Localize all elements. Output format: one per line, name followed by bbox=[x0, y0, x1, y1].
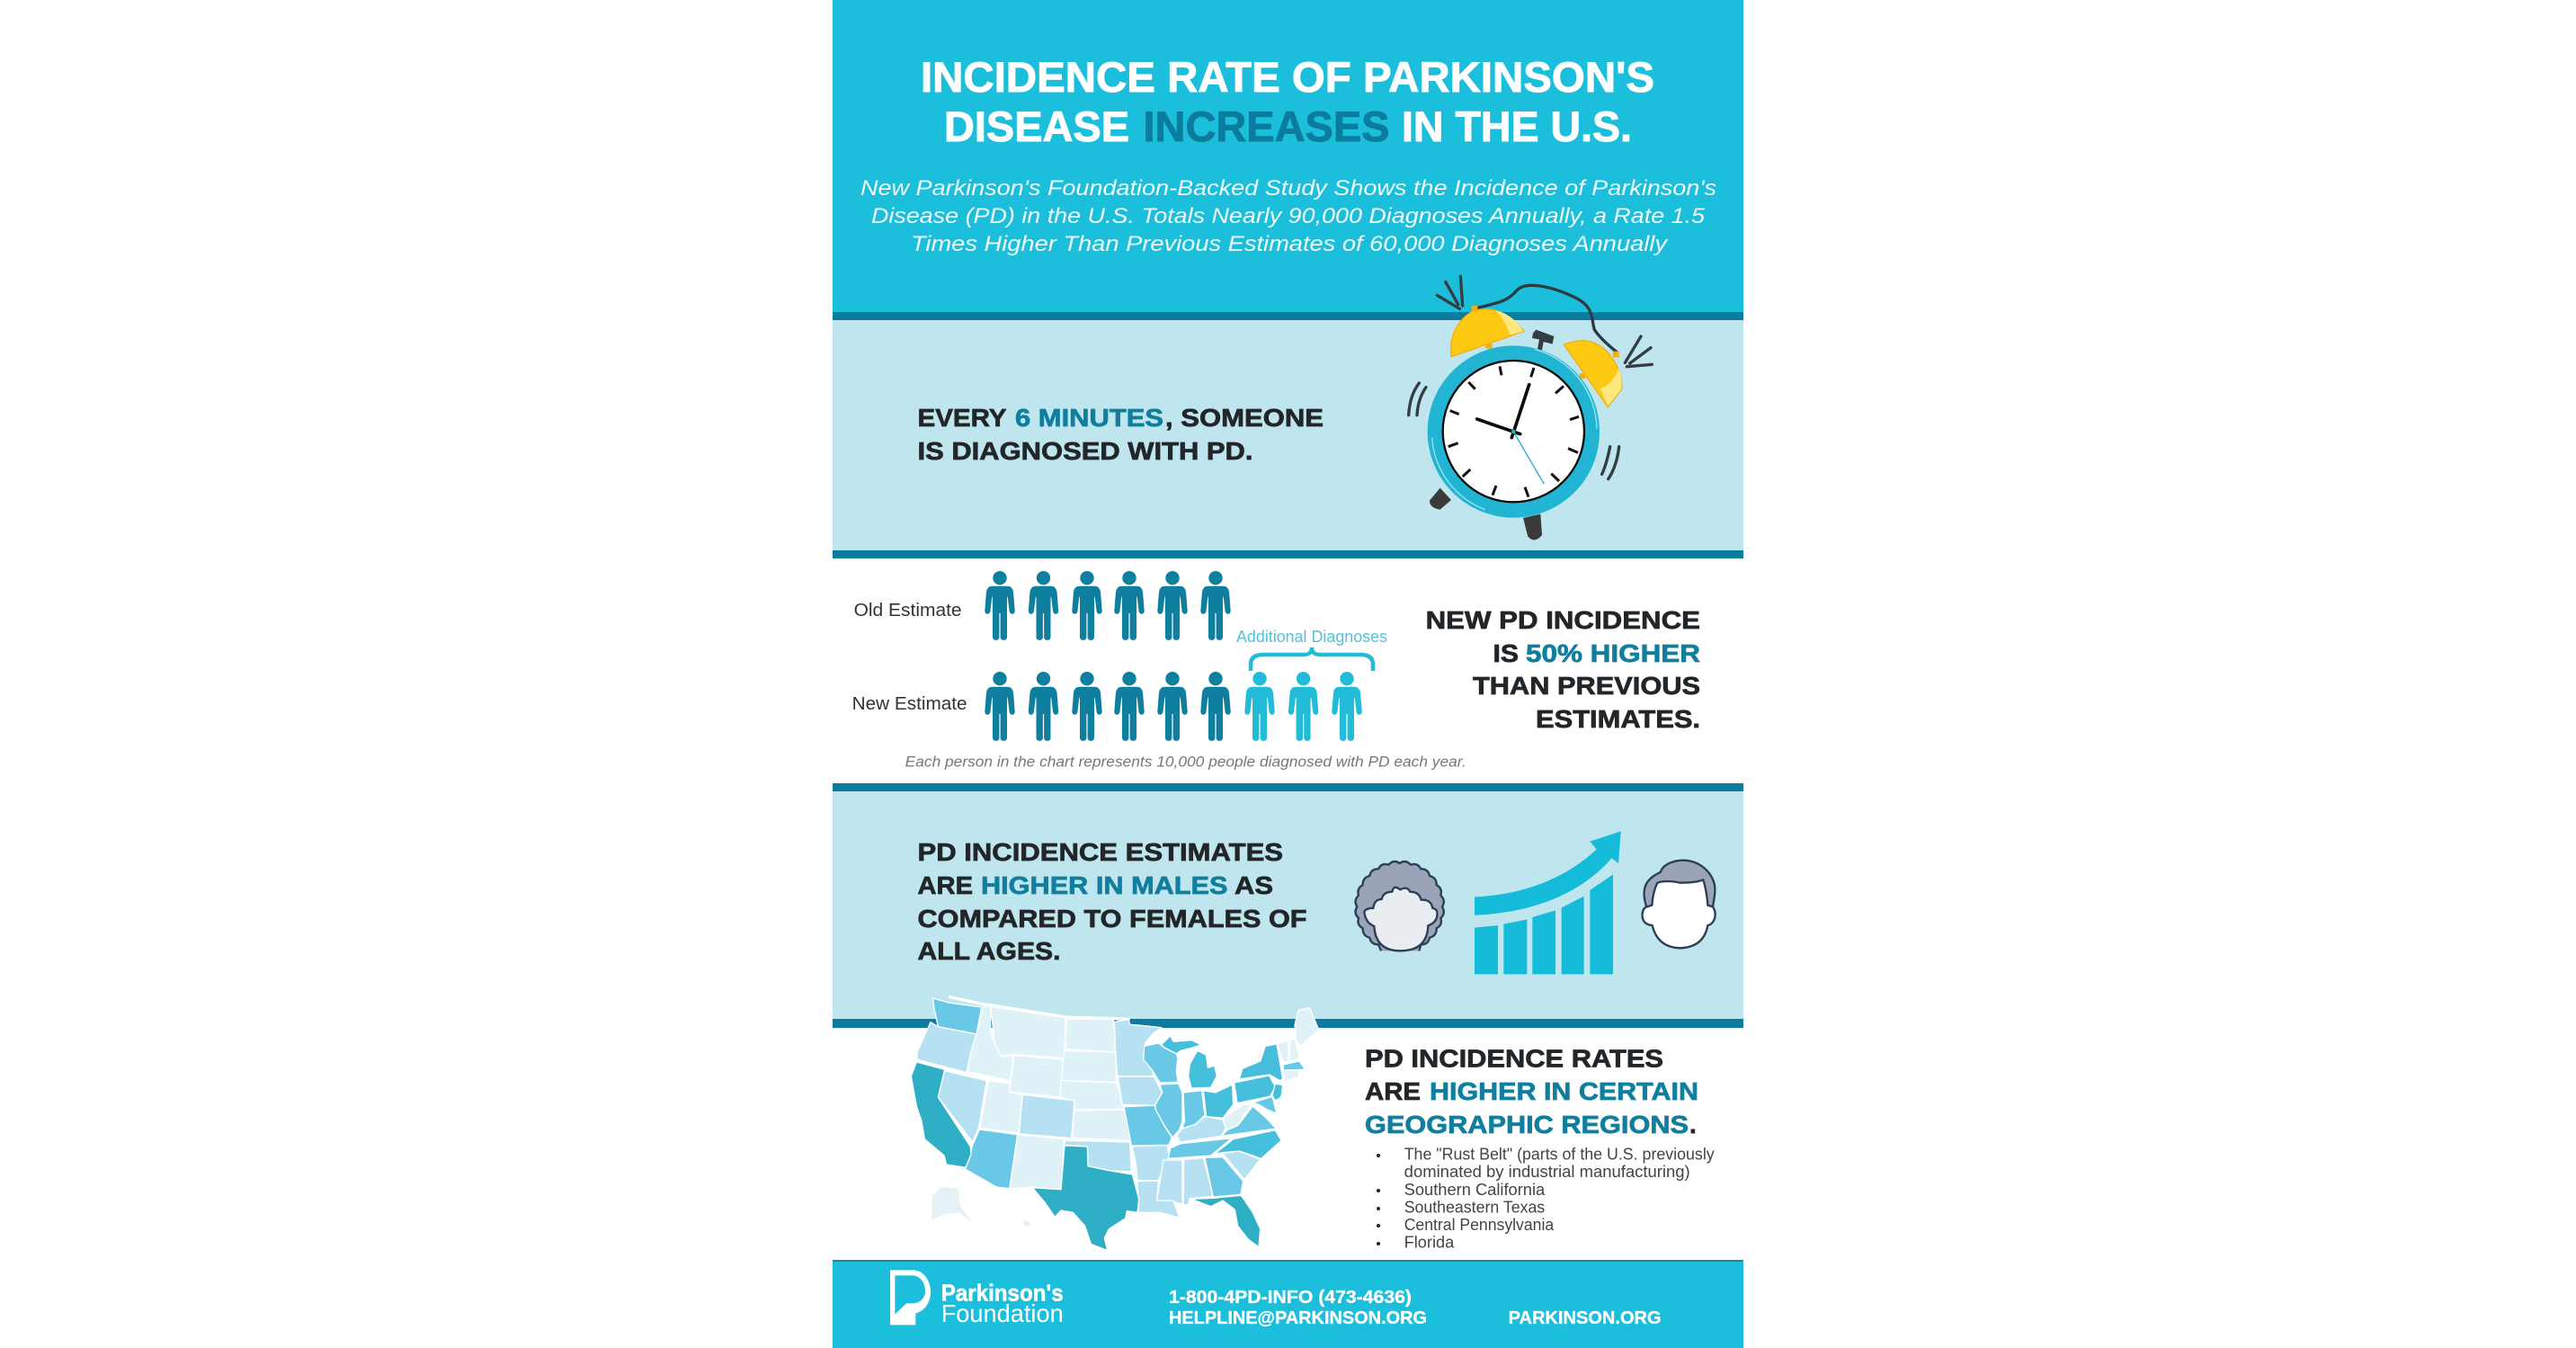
title: INCIDENCE RATE OF PARKINSON'S bbox=[921, 53, 1654, 101]
statement: every 6 minutes: 6 MINUTES bbox=[1015, 404, 1163, 432]
brace bbox=[1251, 647, 1373, 671]
statement: 50% higher: 50% HIGHER bbox=[1526, 639, 1700, 667]
logo: Parkinson's Foundation: Foundation bbox=[941, 1299, 1064, 1327]
list of regions: Southeastern Texas bbox=[1404, 1198, 1545, 1216]
panel: every 6 minutes bbox=[833, 312, 1743, 558]
statement: 50% higher bbox=[1426, 606, 1700, 733]
contact details: 1-800-4PD-INFO (473-4636) bbox=[1169, 1288, 1412, 1308]
subtitle bbox=[860, 176, 1716, 256]
statement: geographic regions: GEOGRAPHIC REGIONS bbox=[1365, 1111, 1689, 1138]
row of people: new estimate bbox=[985, 672, 1362, 741]
statement: every 6 minutes: , SOMEONE bbox=[1165, 404, 1324, 432]
list of regions: Central Pennsylvania bbox=[1404, 1216, 1555, 1234]
statement: higher in males: ARE bbox=[917, 871, 973, 899]
contact details bbox=[1169, 1288, 1427, 1328]
title: IN THE U.S. bbox=[1402, 103, 1632, 150]
statement: higher in males: ALL AGES. bbox=[917, 937, 1061, 965]
statement: geographic regions: PD INCIDENCE RATES bbox=[1365, 1045, 1663, 1073]
title: DISEASE bbox=[944, 103, 1129, 150]
statement: geographic regions bbox=[1365, 1045, 1698, 1138]
map of the United States bbox=[911, 996, 1319, 1251]
statement: geographic regions: . bbox=[1689, 1111, 1697, 1138]
label: new estimate: New Estimate bbox=[852, 694, 967, 714]
row of people: old estimate bbox=[985, 571, 1231, 640]
list of regions: The "Rust Belt" (parts of the U.S. previously bbox=[1404, 1145, 1715, 1163]
logo: Parkinson's Foundation: Parkinson's bbox=[941, 1280, 1064, 1307]
statement: higher in males: AS bbox=[1235, 871, 1273, 899]
icon: alarm clock bbox=[1409, 276, 1652, 540]
statement: every 6 minutes bbox=[917, 404, 1324, 465]
statement: every 6 minutes: EVERY bbox=[917, 404, 1007, 432]
list of regions bbox=[1377, 1145, 1715, 1252]
statement: higher in males bbox=[917, 838, 1307, 965]
panel: footer bbox=[833, 1260, 1743, 1348]
icon: female head bbox=[1356, 861, 1444, 951]
panel: new PD incidence chart bbox=[833, 558, 1743, 783]
subtitle: Times Higher Than Previous Estimates of 60,000 Diagnoses Annually bbox=[911, 232, 1669, 256]
statement: geographic regions: HIGHER IN CERTAIN bbox=[1430, 1077, 1698, 1105]
logo: Parkinson's Foundation bbox=[890, 1270, 1064, 1327]
statement: 50% higher: THAN PREVIOUS bbox=[1473, 672, 1700, 700]
statement: geographic regions: ARE bbox=[1365, 1077, 1421, 1105]
statement: 50% higher: NEW PD INCIDENCE bbox=[1426, 606, 1700, 634]
title: INCREASES bbox=[1144, 103, 1390, 150]
statement: higher in males: PD INCIDENCE ESTIMATES bbox=[917, 838, 1283, 866]
statement: 50% higher: ESTIMATES. bbox=[1536, 705, 1700, 733]
caption: Each person in the chart represents 10,000 people diagnosed with PD each year. bbox=[905, 754, 1466, 771]
statement: higher in males: COMPARED TO FEMALES OF bbox=[917, 905, 1307, 933]
icon: male head bbox=[1643, 861, 1716, 948]
title bbox=[921, 53, 1654, 150]
statement: every 6 minutes: IS DIAGNOSED WITH PD. bbox=[917, 437, 1253, 465]
chart: rising bars with arrow bbox=[1475, 831, 1621, 974]
label: old estimate: Old Estimate bbox=[854, 601, 962, 620]
subtitle: Disease (PD) in the U.S. Totals Nearly 90,000 Diagnoses Annually, a Rate 1.5 bbox=[871, 204, 1706, 228]
panel: males vs females bbox=[833, 783, 1743, 1028]
statement: 50% higher: IS bbox=[1493, 639, 1519, 667]
panel: geographic regions bbox=[833, 996, 1743, 1260]
panel: header bbox=[833, 0, 1743, 312]
list of regions: Southern California bbox=[1404, 1181, 1546, 1199]
website: PARKINSON.ORG bbox=[1509, 1308, 1662, 1328]
list of regions: Florida bbox=[1404, 1234, 1455, 1252]
label: additional diagnoses: Additional Diagnoses bbox=[1236, 628, 1387, 646]
subtitle: New Parkinson's Foundation-Backed Study Shows the Incidence of Parkinson's bbox=[860, 176, 1716, 201]
contact details: HELPLINE@PARKINSON.ORG bbox=[1169, 1308, 1427, 1328]
statement: higher in males: HIGHER IN MALES bbox=[981, 871, 1228, 899]
list of regions: dominated by industrial manufacturing) bbox=[1404, 1163, 1690, 1181]
